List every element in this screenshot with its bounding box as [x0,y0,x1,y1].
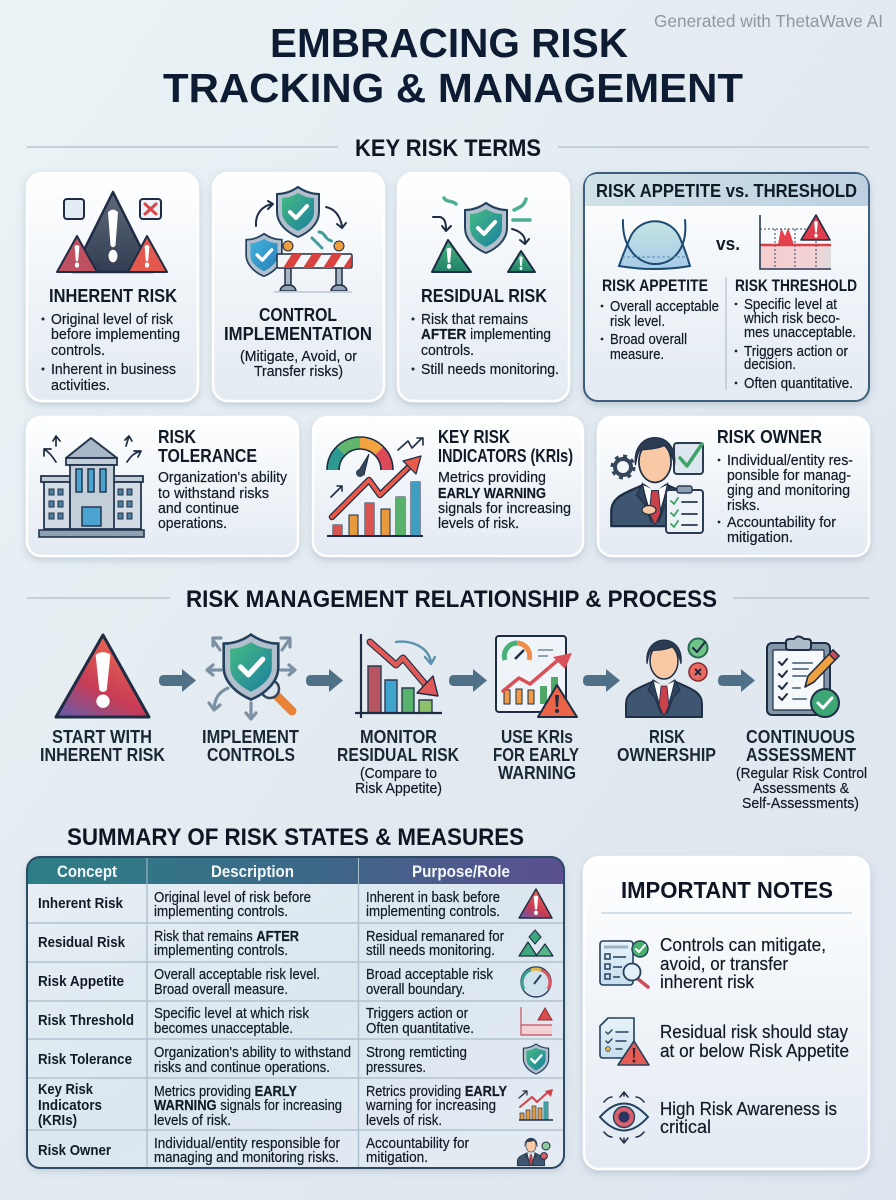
row: risk tolerance: pressures. [366,1060,426,1076]
table header [57,862,510,881]
row: risk owner: mitigation. [366,1150,428,1166]
panel: important notes [584,857,869,1169]
text: risk owner: risks. [727,497,760,514]
description [240,348,357,380]
bullets: AFTER implementing [421,326,551,343]
arrow [583,669,620,692]
text: risk owner: ging and monitoring [727,482,850,499]
row: risk tolerance: Strong remticting [366,1045,467,1061]
text: key risk indicators: KEY RISK [438,426,511,447]
row: risk appetite: Broad overall measure. [154,982,288,998]
bullets: Risk that remains [421,311,528,328]
row: residual risk: still needs monitoring. [366,943,495,959]
text: risk tolerance: TOLERANCE [158,445,257,466]
icon: gauge and rising chart [327,437,423,536]
step: start with inherent risk: START WITH [52,727,152,747]
bullets: Original level of risk [51,311,173,328]
text: key risk indicators: INDICATORS (KRIs) [438,445,573,466]
heading: IMPLEMENTATION [224,323,372,344]
row: risk owner: Risk Owner [38,1142,111,1159]
row: risk threshold [38,1006,552,1037]
row: inherent risk: Inherent in bask before [366,890,500,906]
row: residual risk: Residual Risk [38,934,126,951]
bullets: before implementing [51,326,180,343]
row: key risk indicators: Retrics providing EARLY [366,1084,507,1100]
icon: building [39,436,144,537]
table: summary of risk states [27,857,564,1168]
heading [224,304,372,344]
step: implement controls [202,634,299,765]
column: risk appetite: measure. [610,346,664,363]
step: use kris for early warning [493,636,579,783]
column: risk threshold: Triggers action or [744,343,848,360]
title [163,20,743,111]
text: risk tolerance: and continue [158,500,239,517]
arrow [159,669,196,692]
panel: risk owner [598,417,869,556]
row: residual risk: implementing controls. [154,943,288,959]
column: risk appetite: risk level. [610,313,665,330]
bullets: controls. [51,342,105,359]
step: use kris for early warning: USE KRIs [501,727,573,747]
step: implement controls: IMPLEMENT [202,727,299,747]
row: risk owner [38,1136,550,1166]
heading: CONTROL [259,304,337,325]
row: risk appetite: Broad acceptable risk [366,967,494,983]
column: risk threshold: mes unacceptable. [744,324,856,341]
icon: shields and barrier [246,187,352,292]
process flow [40,634,867,812]
text: key risk indicators: Metrics providing [438,469,546,486]
row: inherent risk: implementing controls. [366,904,500,920]
description: Transfer risks) [254,363,343,380]
row: key risk indicators: Metrics providing EARLY [154,1084,297,1100]
text: risk tolerance [158,426,287,532]
row: residual risk: Risk that remains AFTER [154,929,299,945]
step: start with inherent risk [40,635,165,765]
step: start with inherent risk: INHERENT RISK [40,745,165,765]
note: residual risk: at or below Risk Appetite [660,1041,849,1061]
panel: residual risk [398,173,569,401]
note: residual risk [600,1018,849,1065]
icon: warning triangles [57,192,167,272]
step: risk ownership: OWNERSHIP [617,745,716,765]
step: continuous assessment [736,636,867,812]
row: risk threshold: Risk Threshold [38,1012,134,1029]
note: controls: inherent risk [660,972,755,992]
heading: risk management relationship and process: RISK MANAGEMENT RELATIONSHIP & PROCESS [186,586,717,613]
step: use kris for early warning: FOR EARLY [493,745,579,765]
row: risk tolerance [38,1044,549,1076]
vs label: vs. [716,233,740,254]
row: risk owner: Accountability for [366,1136,469,1152]
row: risk threshold: Specific level at which risk [154,1006,310,1022]
note: controls [600,935,826,992]
step: implement controls: CONTROLS [207,745,295,765]
row: risk threshold: Triggers action or [366,1006,468,1022]
column: risk threshold: Often quantitative. [744,375,853,392]
note: controls: avoid, or transfer [660,954,788,974]
row: risk threshold: becomes unacceptable. [154,1021,293,1037]
row: key risk indicators: levels of risk. [366,1113,442,1129]
column: risk threshold [735,276,857,392]
text: risk tolerance: RISK [158,426,197,447]
title: EMBRACING RISK [270,20,628,66]
heading: key risk terms: KEY RISK TERMS [355,135,541,162]
bullets: controls. [421,342,474,359]
column: risk appetite: Broad overall [610,331,687,348]
arrow [718,669,755,692]
text: risk owner: mitigation. [727,529,793,546]
column: risk threshold: Specific level at [744,296,838,313]
step: risk ownership [617,638,716,765]
note: high risk awareness: High Risk Awareness is [660,1099,837,1119]
bullets [412,311,559,378]
step: monitor residual risk: (Compare to [360,765,437,782]
bullets [42,311,180,394]
icon: threshold chart [760,215,831,269]
row: residual risk: Residual remanared for [366,929,504,945]
step: continuous assessment: CONTINUOUS [746,727,855,747]
heading: summary of risk states and measures: SUMMARY OF RISK STATES & MEASURES [67,824,524,851]
description: (Mitigate, Avoid, or [240,348,357,365]
row: residual risk [38,929,553,959]
row: risk tolerance: risks and continue operations. [154,1060,330,1076]
row: key risk indicators: Key Risk [38,1081,94,1098]
row: key risk indicators: WARNING signals for increasing [154,1098,342,1114]
row: risk appetite: overall boundary. [366,982,465,998]
text: risk tolerance: operations. [158,515,227,532]
text: risk owner [717,426,853,546]
row: risk tolerance: Organization's ability to withstand [154,1045,351,1061]
step: continuous assessment: Assessments & [753,780,849,797]
step: continuous assessment: ASSESSMENT [746,745,856,765]
row: key risk indicators [38,1081,553,1129]
watermark: Generated with ThetaWave AI [654,11,883,31]
column: risk threshold: which risk beco- [743,310,840,327]
step: risk ownership: RISK [649,727,685,747]
panel: key risk indicators [313,417,583,556]
note: high risk awareness: critical [660,1117,711,1137]
text: risk owner: Accountability for [727,514,836,531]
column: risk appetite: RISK APPETITE [602,276,708,295]
row: risk owner: managing and monitoring risks. [154,1150,339,1166]
panel: risk tolerance [27,417,298,556]
column: risk appetite: Overall acceptable [610,298,719,315]
row: risk tolerance: Risk Tolerance [38,1051,132,1068]
text: risk owner: RISK OWNER [717,426,822,447]
row: risk appetite: Overall acceptable risk level. [154,967,320,983]
row: inherent risk: Original level of risk before [154,890,311,906]
row: risk owner: Individual/entity responsible for [154,1136,340,1152]
text: key risk indicators: EARLY WARNING [438,485,546,502]
bullets: Inherent in business [51,361,176,378]
row: key risk indicators: Indicators [38,1097,102,1114]
step: continuous assessment: Self-Assessments) [742,795,859,812]
step: monitor residual risk: Risk Appetite) [355,780,442,797]
step: use kris for early warning: WARNING [498,763,576,783]
row: risk appetite [38,967,551,998]
arrow [306,669,343,692]
icon: owner with clipboard [611,438,703,533]
heading: IMPORTANT NOTES [621,877,833,903]
step: continuous assessment: (Regular Risk Control [736,765,867,782]
step: monitor residual risk: MONITOR [360,727,437,747]
text: risk tolerance: Organization's ability [158,469,287,486]
bullets: activities. [51,377,110,394]
panel: risk appetite vs threshold [584,173,869,401]
text: key risk indicators: levels of risk. [438,515,519,532]
heading: RISK APPETITE vs. THRESHOLD [596,180,857,201]
text: key risk indicators: signals for increasing [438,500,571,517]
bullets: Still needs monitoring. [421,361,559,378]
row: risk appetite: Risk Appetite [38,973,124,990]
row: key risk indicators: levels of risk. [154,1113,231,1129]
row: inherent risk: Inherent Risk [38,895,124,912]
text: risk owner: Individual/entity res- [727,452,853,469]
text: risk owner: ponsible for manag- [727,467,851,484]
row: inherent risk [38,889,552,920]
table header: Description [211,862,294,881]
icon: shield with small triangles [432,198,535,272]
note: controls: Controls can mitigate, [660,935,826,955]
heading: RESIDUAL RISK [421,285,548,306]
column: risk threshold: RISK THRESHOLD [735,276,857,295]
note: high risk awareness [600,1092,837,1143]
step: monitor residual risk [337,634,459,797]
heading: INHERENT RISK [49,285,178,306]
table header: Purpose/Role [412,862,510,881]
column: risk appetite [601,276,719,363]
table header: Concept [57,862,117,881]
note: residual risk: Residual risk should stay [660,1022,848,1042]
arrow [449,669,487,692]
step: monitor residual risk: RESIDUAL RISK [337,745,459,765]
panel: inherent risk [27,173,198,401]
column: risk threshold: decision. [744,356,796,373]
row: risk threshold: Often quantitative. [366,1021,474,1037]
title: TRACKING & MANAGEMENT [163,65,743,111]
text: risk tolerance: to withstand risks [158,485,269,502]
text: key risk indicators [438,426,573,532]
row: key risk indicators: (KRIs) [38,1112,77,1129]
row: key risk indicators: warning for increasing [365,1098,496,1114]
row: inherent risk: implementing controls. [154,904,288,920]
panel: control implementation [213,173,384,401]
icon: appetite dome [619,220,690,269]
